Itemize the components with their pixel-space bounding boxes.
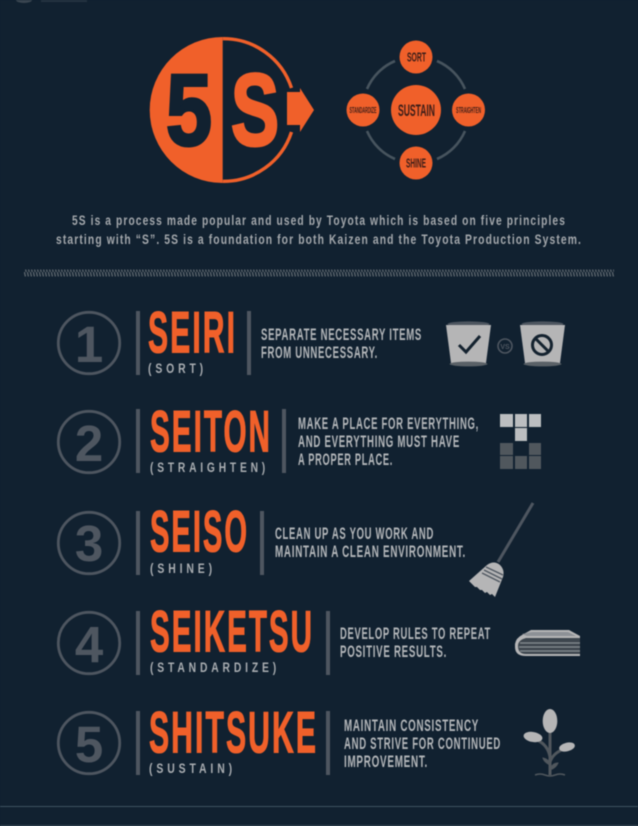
icon: book xyxy=(515,630,580,656)
heading: SEIRI: SEIRI xyxy=(148,300,237,366)
subheading: sustain: (SUSTAIN) xyxy=(149,761,236,776)
icon: 5S logo with arrow xyxy=(150,37,314,183)
icon: arranged squares xyxy=(500,414,541,469)
number 1 badge: 1 xyxy=(75,316,103,373)
number 5 badge: 5 xyxy=(75,716,103,773)
subheading: straighten: (STRAIGHTEN) xyxy=(150,460,269,475)
heading: SHITSUKE: SHITSUKE xyxy=(149,700,318,766)
number 3 badge: 3 xyxy=(75,515,103,572)
row 1: Seiri xyxy=(58,300,565,376)
description: standardize: DEVELOP RULES TO REPEAT xyxy=(340,625,491,643)
subheading: shine: (SHINE) xyxy=(150,561,216,576)
description: standardize xyxy=(340,625,491,661)
description: straighten: MAKE A PLACE FOR EVERYTHING, xyxy=(298,415,479,433)
number 2 badge: 2 xyxy=(75,415,103,472)
description: straighten: AND EVERYTHING MUST HAVE xyxy=(298,433,460,451)
row 5: Shitsuke xyxy=(58,700,576,776)
heading: SEIKETSU: SEIKETSU xyxy=(150,600,314,664)
description: sustain: MAINTAIN CONSISTENCY xyxy=(344,717,479,735)
icon: versus badge: VS xyxy=(500,344,510,351)
diagram: five principles cycle: SORT xyxy=(407,50,426,64)
icon: keep bin with check mark xyxy=(446,321,491,366)
icon: discard bin with prohibition sign xyxy=(520,321,565,366)
row 4: Seiketsu xyxy=(58,600,580,675)
description: straighten: A PROPER PLACE. xyxy=(298,451,393,469)
heading: SEITON: SEITON xyxy=(150,400,272,464)
number 3 badge xyxy=(58,512,120,574)
icon: 5S logo with arrow: 5 xyxy=(166,55,212,167)
icon: 5S logo with arrow: S xyxy=(231,53,279,167)
description: sustain: AND STRIVE FOR CONTINUED xyxy=(344,735,501,753)
diagram: five principles cycle: STRAIGHTEN xyxy=(456,106,481,115)
subheading: sort: (SORT) xyxy=(148,361,207,376)
diagram: five principles cycle: SUSTAIN xyxy=(398,101,435,120)
cropped logo at top edge xyxy=(16,0,87,3)
number 1 badge xyxy=(58,312,120,374)
description: standardize: POSITIVE RESULTS. xyxy=(340,643,447,661)
diagram: five principles cycle xyxy=(346,40,485,180)
intro text xyxy=(56,212,582,247)
description: sort: SEPARATE NECESSARY ITEMS xyxy=(261,326,422,344)
number 5 badge xyxy=(58,712,120,774)
number 4 badge: 4 xyxy=(75,616,104,673)
description: straighten xyxy=(298,415,479,469)
row 3: Seiso: SEISO xyxy=(150,500,249,564)
icon: growing plant xyxy=(523,709,576,776)
number 4 badge xyxy=(58,612,120,674)
diagram: five principles cycle: SHINE xyxy=(406,156,426,170)
row 3: Seiso xyxy=(58,500,533,597)
description: shine: MAINTAIN A CLEAN ENVIRONMENT. xyxy=(275,543,466,561)
subheading: standardize: (STANDARDIZE) xyxy=(150,660,280,675)
description: shine xyxy=(275,525,466,561)
number 2 badge xyxy=(58,411,120,473)
description: sort xyxy=(261,326,422,362)
description: sustain xyxy=(344,717,501,771)
description: shine: CLEAN UP AS YOU WORK AND xyxy=(275,525,434,543)
diagram: five principles cycle: STANDARDIZE xyxy=(350,106,377,115)
description: sustain: IMPROVEMENT. xyxy=(344,753,428,771)
row 2: Seiton xyxy=(58,400,541,475)
description: sort: FROM UNNECESSARY. xyxy=(261,344,378,362)
icon: versus badge xyxy=(498,339,512,353)
icon: broom xyxy=(469,503,533,597)
